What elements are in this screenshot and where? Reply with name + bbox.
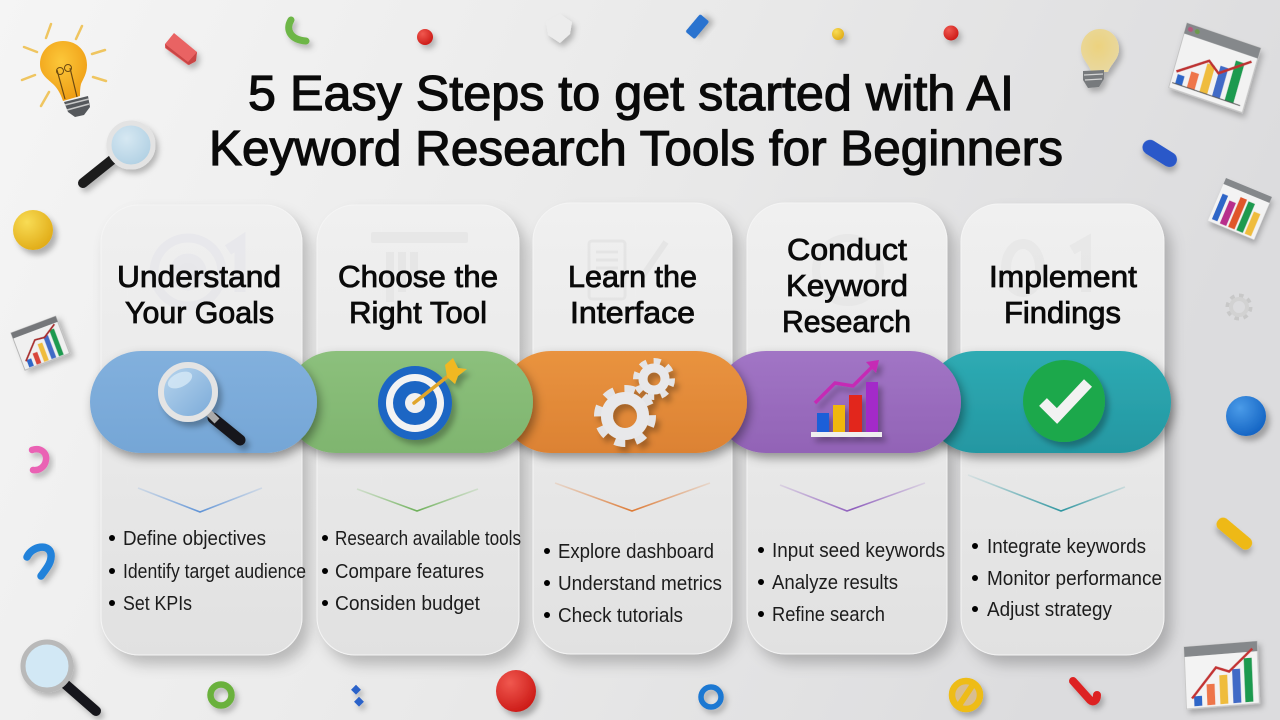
icon: blue hook: [27, 547, 51, 576]
heading: step 4: Conduct: [787, 232, 907, 267]
icon: target with dart: [378, 358, 467, 440]
icon: small blue pair: [351, 685, 364, 707]
panel: step 3 card: [533, 203, 732, 654]
text block: step 1 bullets: Define objectives: [123, 528, 266, 550]
panel: step 1 card: [101, 205, 302, 655]
text block: step 5 bullets: Integrate keywords: [987, 536, 1146, 558]
arrow: step 2 chevron: [357, 489, 478, 511]
pill: step 3 orange: [500, 351, 747, 453]
heading: step 1: [117, 259, 281, 330]
heading: step 4: Research: [782, 304, 911, 339]
text block: step 5 bullets: Monitor performance: [987, 568, 1162, 590]
icon: red ball large: [496, 670, 536, 712]
text block: step 4 bullets: [758, 540, 945, 626]
text block: step 3 bullets: Understand metrics: [558, 573, 722, 595]
heading: step 2: Right Tool: [349, 295, 487, 330]
text block: step 4 bullets: Refine search: [772, 604, 885, 626]
text block: step 2 bullets: [322, 528, 521, 615]
text block: step 2 bullets: Considen budget: [335, 593, 480, 615]
title: Keyword Research Tools for Beginners: [209, 122, 1063, 176]
icon: small yellow ball: [832, 28, 844, 40]
panel: step 5 card: [961, 204, 1164, 655]
icon: yellow ring: [952, 681, 980, 709]
icon: grey gear: [1228, 296, 1250, 318]
arrow: step 5 chevron: [968, 475, 1125, 511]
text block: step 3 bullets: Explore dashboard: [558, 541, 714, 563]
text block: step 4 bullets: Analyze results: [772, 572, 898, 594]
icon: red ball: [417, 29, 433, 45]
icon: blue ball: [1226, 396, 1266, 436]
pill: step 1 blue: [90, 351, 317, 453]
text block: step 5 bullets: [972, 536, 1162, 621]
icon: chart window right: [1208, 178, 1272, 240]
text block: step 2 bullets: Research available tools: [335, 528, 521, 550]
heading: step 5: [989, 259, 1137, 330]
icon: green check: [1023, 360, 1105, 442]
pill: step 5 teal: [925, 351, 1171, 453]
text block: step 1 bullets: [109, 528, 306, 615]
text block: step 1 bullets: Identify target audience: [123, 561, 306, 583]
icon: chart window bottom right: [1184, 641, 1259, 709]
icon: small red ball: [944, 26, 958, 40]
text block: step 2 bullets: Compare features: [335, 561, 484, 583]
icon: gears: [599, 362, 671, 442]
icon: pink hook: [32, 449, 46, 470]
heading: step 3: Learn the: [568, 259, 697, 294]
icon: blue capsule: [1140, 137, 1180, 170]
heading: step 4: [782, 232, 911, 339]
panel: step 4 card: [747, 203, 947, 654]
heading: step 2: Choose the: [338, 259, 498, 294]
title: [209, 67, 1063, 176]
heading: step 5: Findings: [1004, 295, 1121, 330]
icon: red hook: [1073, 681, 1097, 701]
icon: glowing light bulb: [22, 24, 106, 117]
arrow: step 1 chevron: [138, 488, 262, 512]
heading: step 3: Interface: [570, 295, 695, 330]
icon: red block: [165, 33, 197, 65]
icon: yellow capsule: [1214, 515, 1255, 552]
heading: step 4: Keyword: [786, 268, 908, 303]
heading: step 1: Your Goals: [125, 295, 274, 330]
pill: step 2 green: [285, 351, 533, 453]
icon: rising bar chart: [811, 360, 882, 437]
panel: step 2 card: [317, 205, 519, 655]
text block: step 5 bullets: Adjust strategy: [987, 599, 1112, 621]
text block: step 3 bullets: Check tutorials: [558, 605, 683, 627]
arrow: step 3 chevron: [555, 483, 710, 511]
text block: step 3 bullets: [544, 541, 722, 627]
heading: step 3: [568, 259, 697, 330]
pill: step 4 purple: [715, 351, 961, 453]
icon: yellow ball: [13, 210, 53, 250]
icon: blue ring: [701, 687, 721, 707]
text block: step 1 bullets: Set KPIs: [123, 593, 192, 615]
icon: grey blob: [546, 14, 572, 43]
icon: chart window top right: [1169, 23, 1261, 113]
text block: step 4 bullets: Input seed keywords: [772, 540, 945, 562]
arrow: step 4 chevron: [780, 483, 925, 511]
icon: magnifier top left: [83, 123, 153, 183]
title: 5 Easy Steps to get started with AI: [248, 67, 1014, 121]
heading: step 5: Implement: [989, 259, 1137, 294]
icon: magnifier bottom left: [23, 642, 96, 711]
icon: blue block: [685, 14, 709, 39]
icon: pale light bulb: [1081, 29, 1119, 88]
icon: green hook: [289, 20, 306, 41]
heading: step 2: [338, 259, 498, 330]
icon: green ring: [210, 684, 232, 706]
icon: magnifying glass: [161, 365, 240, 440]
heading: step 1: Understand: [117, 259, 281, 294]
icon: chart window left: [11, 316, 70, 370]
